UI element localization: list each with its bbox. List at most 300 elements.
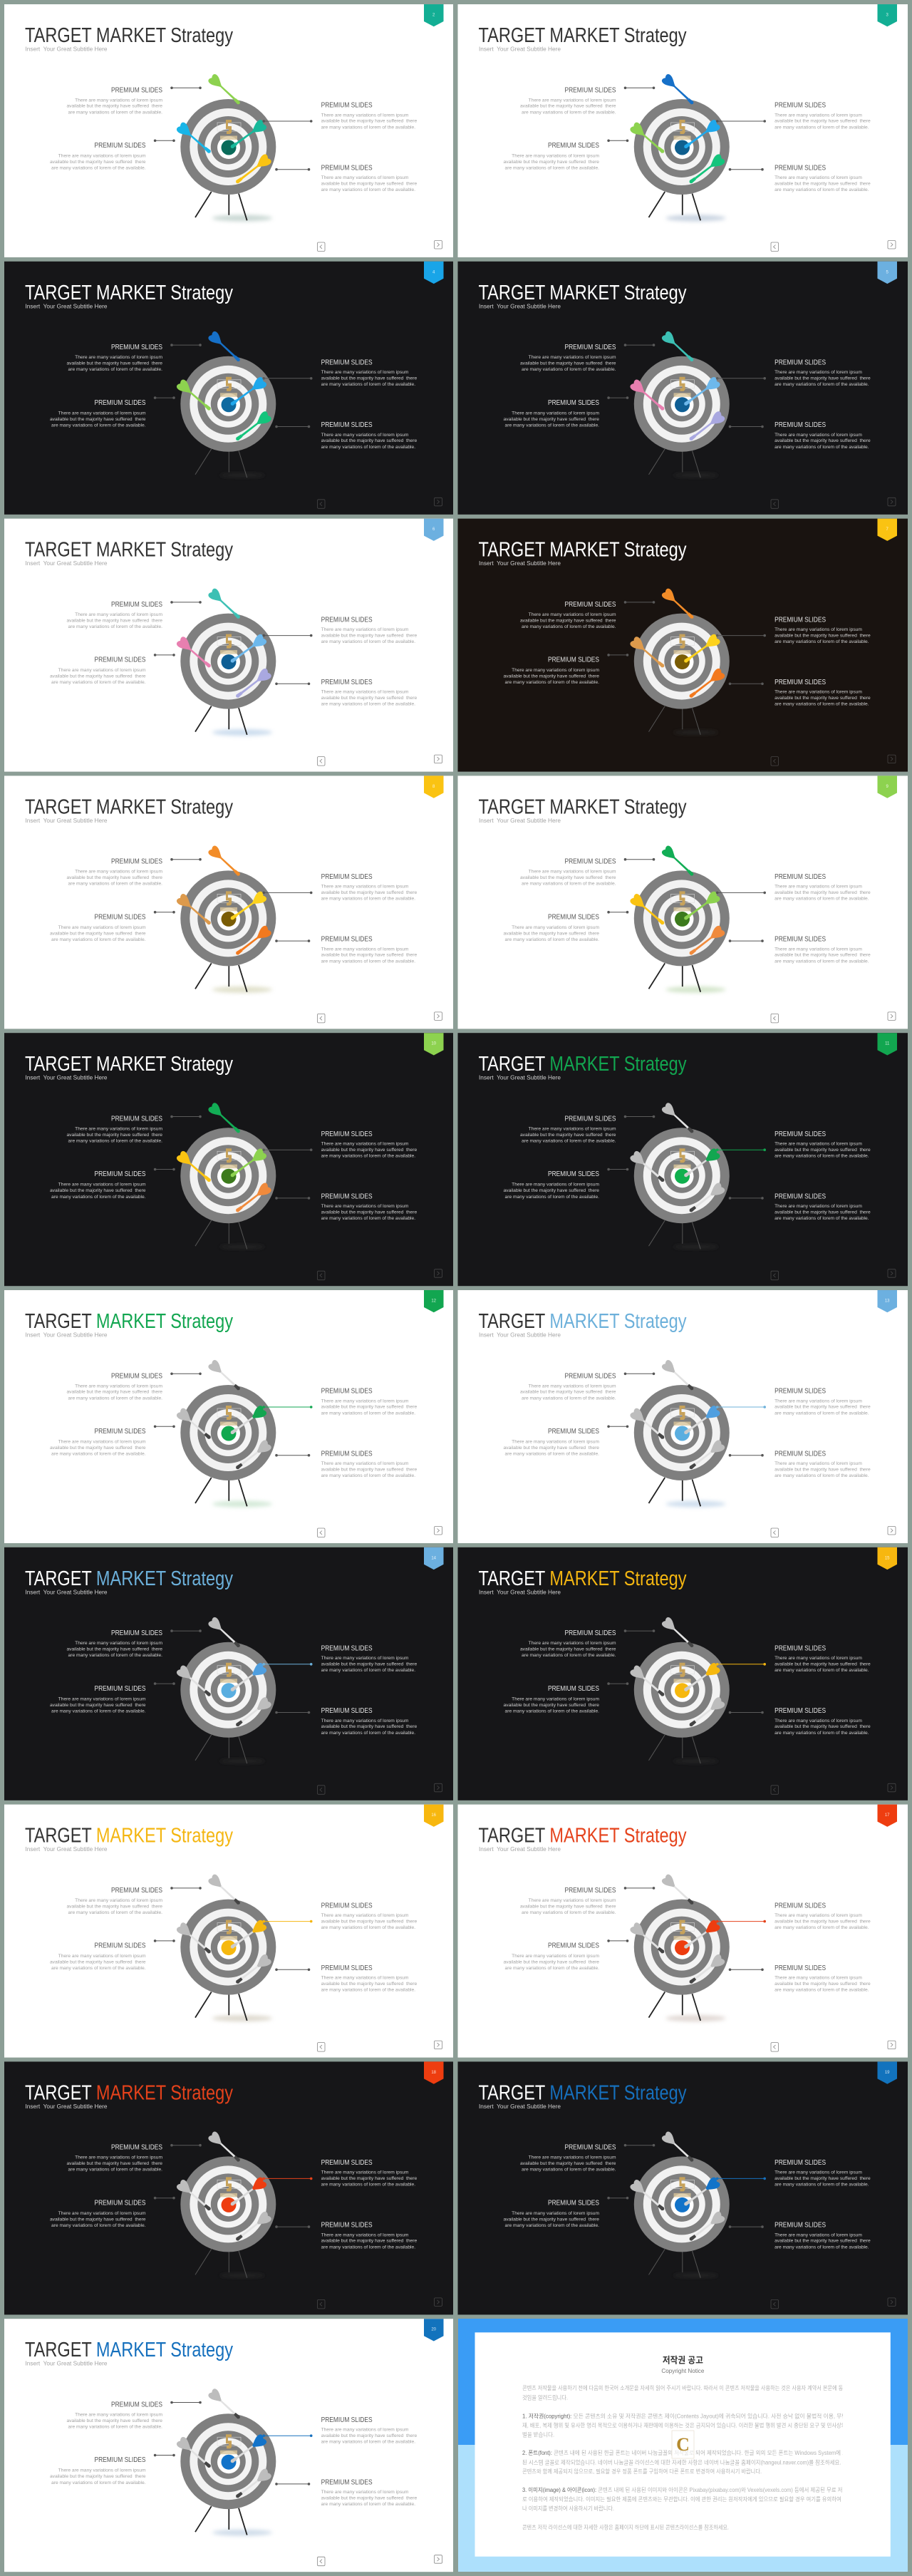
- page tag: 6: [432, 527, 435, 532]
- text block: lower right: [774, 1449, 871, 1478]
- panel background: [457, 1547, 908, 1800]
- text block: lower right: [774, 2221, 871, 2250]
- text block: lower left: There are many variations of lorem ipsum: [512, 411, 599, 416]
- text block: top left: are many variations of lorem of the available.: [68, 882, 162, 887]
- connector lines: [607, 1629, 766, 1714]
- text block: top left: PREMIUM SLIDES: [111, 1371, 162, 1380]
- notice text: 2. 폰트(font): 콘텐츠 내에 된 사용된 한글 폰트는 네이버 나눔글꼴의 저작물로 되어 제작되었습니다. 한글 외의 모든 폰트는 Windows System에 포함된: [522, 2449, 857, 2456]
- text block: top left: There are many variations of lorem ipsum: [529, 1898, 616, 1903]
- title: TARGET MARKET Strategy: [25, 795, 234, 818]
- page tag: [424, 1290, 443, 1312]
- text block: lower left: PREMIUM SLIDES: [94, 398, 145, 407]
- text block: top right: are many variations of lorem of the available.: [774, 1153, 869, 1158]
- two-tone background: [458, 2319, 908, 2572]
- slide 11: [457, 1033, 908, 1286]
- page tag: 12: [431, 1299, 437, 1303]
- text block: lower right: are many variations of lorem of the available.: [321, 445, 415, 450]
- text block: lower left: are many variations of lorem of the available.: [51, 1709, 146, 1714]
- text block: lower right: are many variations of lorem of the available.: [774, 702, 869, 707]
- text block: lower left: available but the majority have suffered there: [50, 674, 146, 679]
- text block: lower right: available but the majority have suffered there: [774, 1982, 871, 1987]
- text block: top right: are many variations of lorem of the available.: [774, 897, 869, 902]
- navigation icons: [318, 498, 442, 508]
- text block: lower right: PREMIUM SLIDES: [321, 1706, 373, 1715]
- text block: lower right: [321, 1192, 417, 1221]
- text block: top left: There are many variations of lorem ipsum: [75, 98, 162, 103]
- text block: top left: PREMIUM SLIDES: [111, 1886, 162, 1895]
- page tag: [424, 4, 443, 26]
- page tag: [878, 262, 897, 284]
- page tag: [878, 2061, 897, 2084]
- text block: lower left: available but the majority have suffered there: [50, 1188, 146, 1193]
- navigation icons: [771, 498, 896, 508]
- text block: lower right: available but the majority have suffered there: [774, 1724, 871, 1729]
- subtitle: Insert Your Great Subtitle Here: [26, 560, 108, 567]
- panel background: [4, 1033, 453, 1286]
- panel background: [4, 262, 453, 515]
- text block: lower left: are many variations of lorem of the available.: [505, 2223, 599, 2228]
- text block: lower left: There are many variations of lorem ipsum: [512, 1954, 599, 1959]
- text block: lower right: [321, 2478, 417, 2507]
- text block: top left: PREMIUM SLIDES: [564, 2143, 616, 2152]
- page tag: 9: [886, 785, 889, 789]
- slide 5: [457, 262, 908, 515]
- page tag: [878, 519, 897, 541]
- text block: top right: PREMIUM SLIDES: [774, 2158, 826, 2167]
- text block: top right: [321, 2416, 417, 2445]
- text block: top right: [321, 358, 417, 387]
- text block: top left: PREMIUM SLIDES: [564, 1629, 616, 1637]
- notice text: 것임을 알려드립니다.: [522, 2394, 568, 2401]
- text block: lower left: available but the majority have suffered there: [50, 2474, 146, 2479]
- text block: top right: There are many variations of lorem ipsum: [774, 113, 862, 118]
- page tag: 20: [431, 2328, 437, 2332]
- page tag: [424, 776, 443, 798]
- navigation icons: [771, 2041, 896, 2051]
- text block: top left: PREMIUM SLIDES: [564, 86, 616, 94]
- text block: top left: [520, 1371, 616, 1401]
- target with darts: [175, 2131, 276, 2278]
- navigation icons: [318, 1527, 442, 1537]
- text block: lower right: are many variations of lorem of the available.: [321, 2245, 415, 2250]
- text block: lower left: are many variations of lorem of the available.: [51, 1195, 146, 1200]
- text block: lower right: [774, 935, 871, 964]
- subtitle: Insert Your Great Subtitle Here: [26, 1845, 108, 1853]
- connector lines: [607, 858, 766, 942]
- navigation icons: [318, 1012, 442, 1023]
- text block: top right: available but the majority have suffered there: [774, 376, 871, 381]
- target with darts: [629, 845, 730, 993]
- connector lines: [154, 1116, 313, 1200]
- text block: lower right: PREMIUM SLIDES: [321, 421, 373, 429]
- text block: top left: are many variations of lorem of the available.: [522, 1653, 616, 1658]
- notice text: 1. 저작권(copyright): 모든 콘텐츠의 소유 및 저작권은 콘텐츠 제이(Contents Jayout)에 귀속되어 있습니다. 사전 승낙 없이 불법적 이용, 무단전재: [522, 2412, 857, 2419]
- target with darts: [629, 1873, 730, 2021]
- text block: top left: available but the majority have suffered there: [520, 1647, 616, 1652]
- text block: lower right: [774, 421, 871, 450]
- text block: top right: PREMIUM SLIDES: [774, 1387, 826, 1396]
- page tag: [878, 1290, 897, 1312]
- text block: lower right: [321, 1964, 417, 1993]
- text block: top left: PREMIUM SLIDES: [564, 857, 616, 866]
- text block: lower left: PREMIUM SLIDES: [94, 1684, 145, 1693]
- text block: top left: are many variations of lorem of the available.: [522, 882, 616, 887]
- text block: lower right: There are many variations of lorem ipsum: [774, 1976, 862, 1981]
- text block: top left: available but the majority have suffered there: [520, 618, 616, 623]
- text block: top right: There are many variations of lorem ipsum: [774, 2170, 862, 2175]
- text block: lower left: There are many variations of lorem ipsum: [58, 2468, 146, 2473]
- text block: top right: PREMIUM SLIDES: [321, 615, 373, 624]
- text block: lower right: There are many variations of lorem ipsum: [321, 947, 409, 952]
- navigation icons: [318, 1269, 442, 1280]
- page tag: 17: [885, 1813, 890, 1818]
- text block: top left: [66, 86, 162, 115]
- connector lines: [154, 601, 313, 685]
- subtitle: Insert Your Great Subtitle Here: [479, 560, 561, 567]
- navigation icons: [318, 755, 442, 766]
- text block: top right: PREMIUM SLIDES: [774, 1644, 826, 1653]
- text block: top right: There are many variations of lorem ipsum: [774, 1141, 862, 1146]
- text block: top right: [321, 615, 417, 644]
- notice text: 나 이미지를 변경하여 사용하시기 바랍니다.: [522, 2505, 614, 2512]
- text block: lower left: PREMIUM SLIDES: [548, 141, 599, 150]
- sub heading: Copyright Notice: [661, 2367, 705, 2374]
- text block: top left: There are many variations of lorem ipsum: [75, 1384, 162, 1389]
- text block: top left: [520, 1629, 616, 1658]
- text block: lower left: There are many variations of lorem ipsum: [512, 1183, 599, 1187]
- title: TARGET MARKET Strategy: [479, 1310, 687, 1333]
- text block: top right: [774, 2158, 871, 2188]
- connector lines: [607, 344, 766, 428]
- slide 7: [457, 519, 908, 772]
- text block: top left: available but the majority have suffered there: [520, 104, 616, 109]
- text block: lower left: There are many variations of lorem ipsum: [58, 154, 146, 158]
- text block: lower left: are many variations of lorem of the available.: [505, 423, 599, 428]
- navigation icons: [318, 2555, 442, 2566]
- text block: lower right: There are many variations of lorem ipsum: [774, 1719, 862, 1724]
- title: TARGET MARKET Strategy: [479, 24, 687, 47]
- text block: top left: PREMIUM SLIDES: [111, 2143, 162, 2152]
- text block: top right: available but the majority have suffered there: [774, 2176, 871, 2181]
- text block: top right: [774, 358, 871, 387]
- text block: top left: are many variations of lorem of the available.: [68, 624, 162, 629]
- text block: lower right: PREMIUM SLIDES: [321, 2478, 373, 2486]
- text block: lower left: PREMIUM SLIDES: [94, 1942, 145, 1950]
- panel background: [457, 1033, 908, 1286]
- text block: lower left: [503, 656, 599, 685]
- subtitle: Insert Your Great Subtitle Here: [26, 1074, 108, 1081]
- text block: top left: There are many variations of lorem ipsum: [75, 2155, 162, 2160]
- navigation icons: [318, 1783, 442, 1794]
- text block: lower right: PREMIUM SLIDES: [774, 678, 826, 686]
- text block: top right: [321, 1644, 417, 1673]
- text block: lower left: available but the majority have suffered there: [503, 931, 599, 936]
- subtitle: Insert Your Great Subtitle Here: [26, 1588, 108, 1595]
- target with darts: [175, 1616, 276, 1763]
- text block: lower right: [774, 678, 871, 707]
- notice text: 콘텐츠와 함께 제공되지 않으므로, 필요할 경우 정품 폰트를 구입하여 다른 폰트로 변경하여 사용하시기 바랍니다.: [522, 2468, 762, 2475]
- slide 14: [4, 1547, 453, 1800]
- page tag: [878, 1547, 897, 1570]
- connector lines: [607, 87, 766, 171]
- page tag: 13: [885, 1299, 890, 1303]
- text block: top left: available but the majority have suffered there: [520, 1904, 616, 1909]
- text block: lower right: available but the majority have suffered there: [321, 2239, 417, 2244]
- title: TARGET MARKET Strategy: [479, 2081, 687, 2104]
- text block: top right: [321, 872, 417, 902]
- text block: lower left: There are many variations of lorem ipsum: [512, 1440, 599, 1444]
- text block: top right: available but the majority have suffered there: [774, 1405, 871, 1410]
- text block: top right: There are many variations of lorem ipsum: [321, 2427, 409, 2432]
- connector lines: [154, 2401, 313, 2485]
- text block: lower right: are many variations of lorem of the available.: [321, 2502, 415, 2507]
- text block: top left: are many variations of lorem of the available.: [68, 367, 162, 372]
- text block: top right: available but the majority have suffered there: [321, 2176, 417, 2181]
- text block: lower right: There are many variations of lorem ipsum: [774, 690, 862, 695]
- text block: lower left: available but the majority have suffered there: [50, 1446, 146, 1451]
- page tag: [878, 776, 897, 798]
- text block: top left: [66, 2143, 162, 2173]
- text block: lower left: There are many variations of lorem ipsum: [512, 1696, 599, 1701]
- text block: top left: [66, 1629, 162, 1658]
- text block: lower left: [50, 2198, 146, 2228]
- text block: lower right: available but the majority have suffered there: [321, 438, 417, 443]
- text block: lower right: PREMIUM SLIDES: [774, 1706, 826, 1715]
- text block: lower right: available but the majority have suffered there: [774, 1467, 871, 1472]
- text block: lower right: are many variations of lorem of the available.: [774, 959, 869, 964]
- text block: top right: are many variations of lorem of the available.: [321, 125, 415, 130]
- connector lines: [154, 2144, 313, 2228]
- text block: top right: There are many variations of lorem ipsum: [321, 885, 409, 890]
- text block: top left: are many variations of lorem of the available.: [522, 110, 616, 115]
- page tag: 7: [886, 527, 889, 532]
- text block: top left: [66, 343, 162, 372]
- page tag: [424, 262, 443, 284]
- text block: lower left: PREMIUM SLIDES: [94, 912, 145, 921]
- text block: top right: PREMIUM SLIDES: [321, 1644, 373, 1653]
- text block: top right: PREMIUM SLIDES: [774, 1130, 826, 1138]
- title: TARGET MARKET Strategy: [479, 282, 687, 304]
- subtitle: Insert Your Great Subtitle Here: [479, 1074, 561, 1081]
- text block: top left: [66, 2401, 162, 2429]
- text block: top right: are many variations of lorem of the available.: [774, 1411, 869, 1416]
- text block: top left: are many variations of lorem of the available.: [68, 1396, 162, 1401]
- panel background: [457, 776, 908, 1029]
- text block: top right: There are many variations of lorem ipsum: [321, 113, 409, 118]
- text block: top right: are many variations of lorem of the available.: [774, 382, 869, 387]
- subtitle: Insert Your Great Subtitle Here: [26, 1331, 108, 1339]
- text block: top right: are many variations of lorem of the available.: [321, 1411, 415, 1416]
- text block: lower right: PREMIUM SLIDES: [774, 935, 826, 944]
- text block: top left: available but the majority have suffered there: [520, 875, 616, 880]
- text block: lower left: are many variations of lorem of the available.: [505, 166, 599, 171]
- target with darts: [629, 1102, 730, 1249]
- text block: lower left: There are many variations of lorem ipsum: [58, 2211, 146, 2216]
- slide 15: [457, 1547, 908, 1800]
- text block: lower right: There are many variations of lorem ipsum: [321, 1719, 409, 1724]
- text block: lower left: [503, 1684, 599, 1714]
- text block: top right: are many variations of lorem of the available.: [774, 1925, 869, 1930]
- text block: lower left: are many variations of lorem of the available.: [51, 680, 146, 685]
- text block: top left: available but the majority have suffered there: [66, 1390, 162, 1395]
- slide 12: [4, 1290, 453, 1543]
- text block: top left: available but the majority have suffered there: [66, 2161, 162, 2166]
- text block: lower left: are many variations of lorem of the available.: [505, 1709, 599, 1714]
- text block: lower left: available but the majority have suffered there: [50, 1703, 146, 1708]
- panel background: [4, 4, 453, 257]
- text block: lower left: are many variations of lorem of the available.: [51, 1452, 146, 1457]
- text block: top left: available but the majority have suffered there: [66, 2418, 162, 2423]
- connector lines: [607, 601, 766, 685]
- panel background: [4, 2319, 453, 2572]
- text block: lower right: PREMIUM SLIDES: [321, 935, 373, 944]
- navigation icons: [771, 1783, 896, 1794]
- text block: lower left: available but the majority have suffered there: [503, 1188, 599, 1193]
- text block: top left: PREMIUM SLIDES: [111, 343, 162, 351]
- text block: lower left: available but the majority have suffered there: [503, 674, 599, 679]
- title: TARGET MARKET Strategy: [479, 1567, 687, 1590]
- text block: top right: There are many variations of lorem ipsum: [774, 1656, 862, 1661]
- text block: lower right: PREMIUM SLIDES: [321, 678, 373, 686]
- text block: lower left: [503, 2198, 599, 2228]
- text block: top left: There are many variations of lorem ipsum: [75, 1126, 162, 1131]
- text block: lower right: There are many variations of lorem ipsum: [321, 690, 409, 695]
- text block: lower left: are many variations of lorem of the available.: [51, 2480, 146, 2485]
- text block: lower right: are many variations of lorem of the available.: [774, 1731, 869, 1736]
- target with darts: [629, 587, 730, 735]
- subtitle: Insert Your Great Subtitle Here: [479, 1331, 561, 1339]
- text block: top left: [66, 1886, 162, 1915]
- title: TARGET MARKET Strategy: [25, 2081, 234, 2104]
- text block: lower left: [503, 1427, 599, 1457]
- subtitle: Insert Your Great Subtitle Here: [479, 2103, 561, 2110]
- text block: top left: PREMIUM SLIDES: [564, 1886, 616, 1895]
- text block: top right: PREMIUM SLIDES: [774, 101, 826, 110]
- text block: lower left: [50, 398, 146, 428]
- connector lines: [154, 1373, 313, 1457]
- text block: lower left: PREMIUM SLIDES: [94, 141, 145, 150]
- text block: top right: [774, 1901, 871, 1930]
- slide 8: [4, 776, 453, 1029]
- text block: top left: are many variations of lorem of the available.: [68, 2424, 162, 2429]
- page tag: [424, 1547, 443, 1570]
- navigation icons: [318, 241, 442, 251]
- notice text: 로 이용하여 제작되었습니다. 이미지는 필요한 제품에 콘텐츠와는 무관합니다. 이에 관한 권리는 원저작자에게 있으므로 필요할 경우 여기를 유의하여 주세요: [522, 2495, 857, 2503]
- text block: top right: [321, 1130, 417, 1159]
- text block: lower left: PREMIUM SLIDES: [548, 398, 599, 407]
- text block: lower right: [774, 1192, 871, 1221]
- text block: top right: There are many variations of lorem ipsum: [774, 370, 862, 375]
- text block: top left: [520, 1886, 616, 1915]
- text block: lower right: are many variations of lorem of the available.: [774, 1473, 869, 1478]
- text block: lower right: available but the majority have suffered there: [321, 696, 417, 701]
- text block: top left: are many variations of lorem of the available.: [522, 624, 616, 629]
- page tag: [424, 519, 443, 541]
- text block: lower left: available but the majority have suffered there: [503, 2217, 599, 2222]
- text block: lower left: There are many variations of lorem ipsum: [512, 2211, 599, 2216]
- text block: lower left: are many variations of lorem of the available.: [51, 937, 146, 942]
- text block: top left: available but the majority have suffered there: [66, 361, 162, 366]
- target with darts: [629, 2131, 730, 2278]
- text block: lower right: are many variations of lorem of the available.: [774, 445, 869, 450]
- notice text: 벌을 받습니다.: [522, 2431, 554, 2438]
- text block: top right: are many variations of lorem of the available.: [321, 2439, 415, 2444]
- text block: lower right: There are many variations of lorem ipsum: [774, 947, 862, 952]
- text block: lower right: PREMIUM SLIDES: [774, 1192, 826, 1200]
- text block: top left: available but the majority have suffered there: [66, 1133, 162, 1138]
- target with darts: [629, 1616, 730, 1763]
- text block: lower right: available but the majority have suffered there: [321, 1982, 417, 1987]
- page tag: [878, 4, 897, 26]
- title: TARGET MARKET Strategy: [479, 795, 687, 818]
- text block: top right: available but the majority have suffered there: [774, 890, 871, 895]
- text block: lower right: available but the majority have suffered there: [774, 953, 871, 958]
- text block: top right: are many variations of lorem of the available.: [321, 897, 415, 902]
- text block: lower left: PREMIUM SLIDES: [548, 1684, 599, 1693]
- text block: top left: [520, 86, 616, 115]
- text block: top left: available but the majority have suffered there: [66, 1904, 162, 1909]
- target with darts: [175, 73, 276, 222]
- subtitle: Insert Your Great Subtitle Here: [26, 302, 108, 309]
- text block: lower right: [774, 1706, 871, 1736]
- connector lines: [154, 858, 313, 942]
- text block: lower right: There are many variations of lorem ipsum: [321, 1976, 409, 1981]
- text block: top right: There are many variations of lorem ipsum: [774, 885, 862, 890]
- text block: top left: There are many variations of lorem ipsum: [529, 870, 616, 875]
- text block: top left: [66, 1371, 162, 1401]
- text block: top left: available but the majority have suffered there: [520, 1390, 616, 1395]
- text block: lower left: available but the majority have suffered there: [503, 417, 599, 422]
- page tag: 4: [432, 270, 435, 274]
- connector lines: [607, 1116, 766, 1200]
- text block: lower right: are many variations of lorem of the available.: [774, 2245, 869, 2250]
- text block: top right: [774, 1387, 871, 1416]
- text block: top left: are many variations of lorem of the available.: [68, 1138, 162, 1143]
- text block: lower left: There are many variations of lorem ipsum: [58, 1440, 146, 1444]
- text block: top right: [321, 101, 417, 130]
- watermark: [672, 2431, 694, 2458]
- panel background: [457, 1290, 908, 1543]
- text block: top right: PREMIUM SLIDES: [774, 358, 826, 366]
- text block: top left: are many variations of lorem of the available.: [68, 1910, 162, 1915]
- text block: top right: There are many variations of lorem ipsum: [321, 627, 409, 632]
- target with darts: [175, 845, 276, 993]
- title: TARGET MARKET Strategy: [479, 1825, 687, 1848]
- text block: top left: are many variations of lorem of the available.: [522, 1910, 616, 1915]
- text block: lower right: [774, 1964, 871, 1993]
- text block: lower right: available but the majority have suffered there: [321, 1724, 417, 1729]
- text block: top right: [774, 872, 871, 902]
- text block: top left: [520, 600, 616, 629]
- navigation icons: [318, 2041, 442, 2051]
- text block: lower right: are many variations of lorem of the available.: [321, 1731, 415, 1736]
- text block: top left: are many variations of lorem of the available.: [68, 110, 162, 115]
- text block: lower right: [321, 421, 417, 450]
- text block: lower right: are many variations of lorem of the available.: [321, 1988, 415, 1993]
- text block: lower right: There are many variations of lorem ipsum: [321, 175, 409, 180]
- text block: top right: available but the majority have suffered there: [774, 633, 871, 638]
- text block: lower left: PREMIUM SLIDES: [548, 656, 599, 664]
- text block: top left: are many variations of lorem of the available.: [522, 1396, 616, 1401]
- text block: lower right: available but the majority have suffered there: [321, 2495, 417, 2500]
- text block: top left: [66, 1115, 162, 1143]
- text block: top left: [66, 857, 162, 887]
- text block: top right: available but the majority have suffered there: [321, 633, 417, 638]
- text block: lower left: available but the majority have suffered there: [503, 1703, 599, 1708]
- slide 19: [457, 2061, 908, 2314]
- text block: lower left: [50, 912, 146, 942]
- panel background: [457, 262, 908, 515]
